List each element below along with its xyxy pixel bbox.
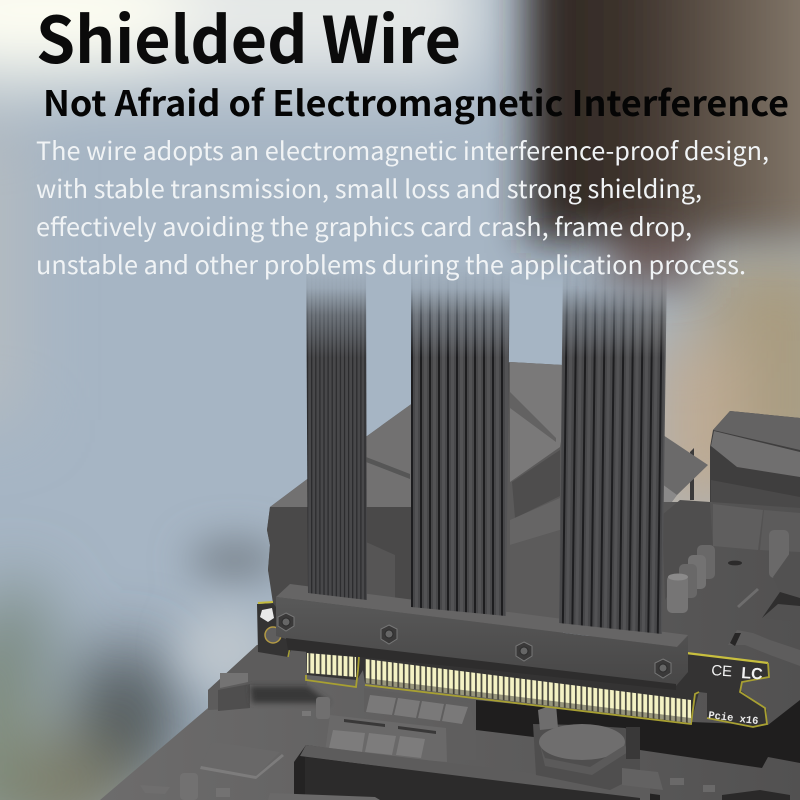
shadow under connector (476, 700, 800, 768)
pcb left tab (257, 602, 357, 680)
bolt 4 (655, 659, 671, 678)
cable 1 (306, 260, 367, 600)
pcb main edge (300, 640, 768, 727)
cable 2 (411, 260, 510, 616)
memory clips (325, 688, 476, 762)
gold fingers large (365, 659, 691, 723)
right heatsink support post (690, 448, 694, 500)
icon: mounting hole (265, 627, 281, 643)
pcie slot (268, 745, 660, 800)
left heatsink (267, 362, 563, 640)
cpu socket and latch (728, 553, 800, 666)
voltage block row (662, 500, 800, 600)
gold edge lines (306, 652, 769, 727)
icon: logo (260, 608, 274, 622)
pcie label: Pcie x16 (708, 710, 759, 728)
body text: unstable and other problems during the application process. (36, 246, 746, 282)
small smd parts (670, 778, 790, 800)
right heatsink (710, 411, 800, 520)
bolt 2 (381, 625, 397, 644)
body text (36, 132, 769, 282)
right flap heatsink (662, 435, 708, 515)
body text: effectively avoiding the graphics card crash, frame drop, (36, 208, 692, 244)
connector front face (276, 597, 688, 686)
body text: The wire adopts an electromagnetic interference-proof design, (36, 132, 769, 168)
subtitle: Not Afraid of Electromagnetic Interference (43, 76, 789, 127)
bolt 1 (278, 613, 294, 631)
shielded cables (306, 260, 667, 634)
board left raised shape (208, 645, 330, 711)
CE mark: CE (711, 662, 733, 680)
bolt 3 (516, 642, 532, 661)
LC mark: LC (741, 665, 764, 684)
small components lower left (140, 697, 330, 800)
board surface (100, 502, 800, 800)
gold fingers small (307, 653, 356, 677)
cable 3 (559, 260, 667, 634)
body text: with stable transmission, small loss and strong shielding, (36, 170, 702, 206)
riser connector (257, 584, 769, 728)
motherboard (100, 362, 800, 800)
capacitors (667, 530, 789, 613)
battery holder (533, 704, 663, 790)
connector top face (276, 584, 688, 647)
